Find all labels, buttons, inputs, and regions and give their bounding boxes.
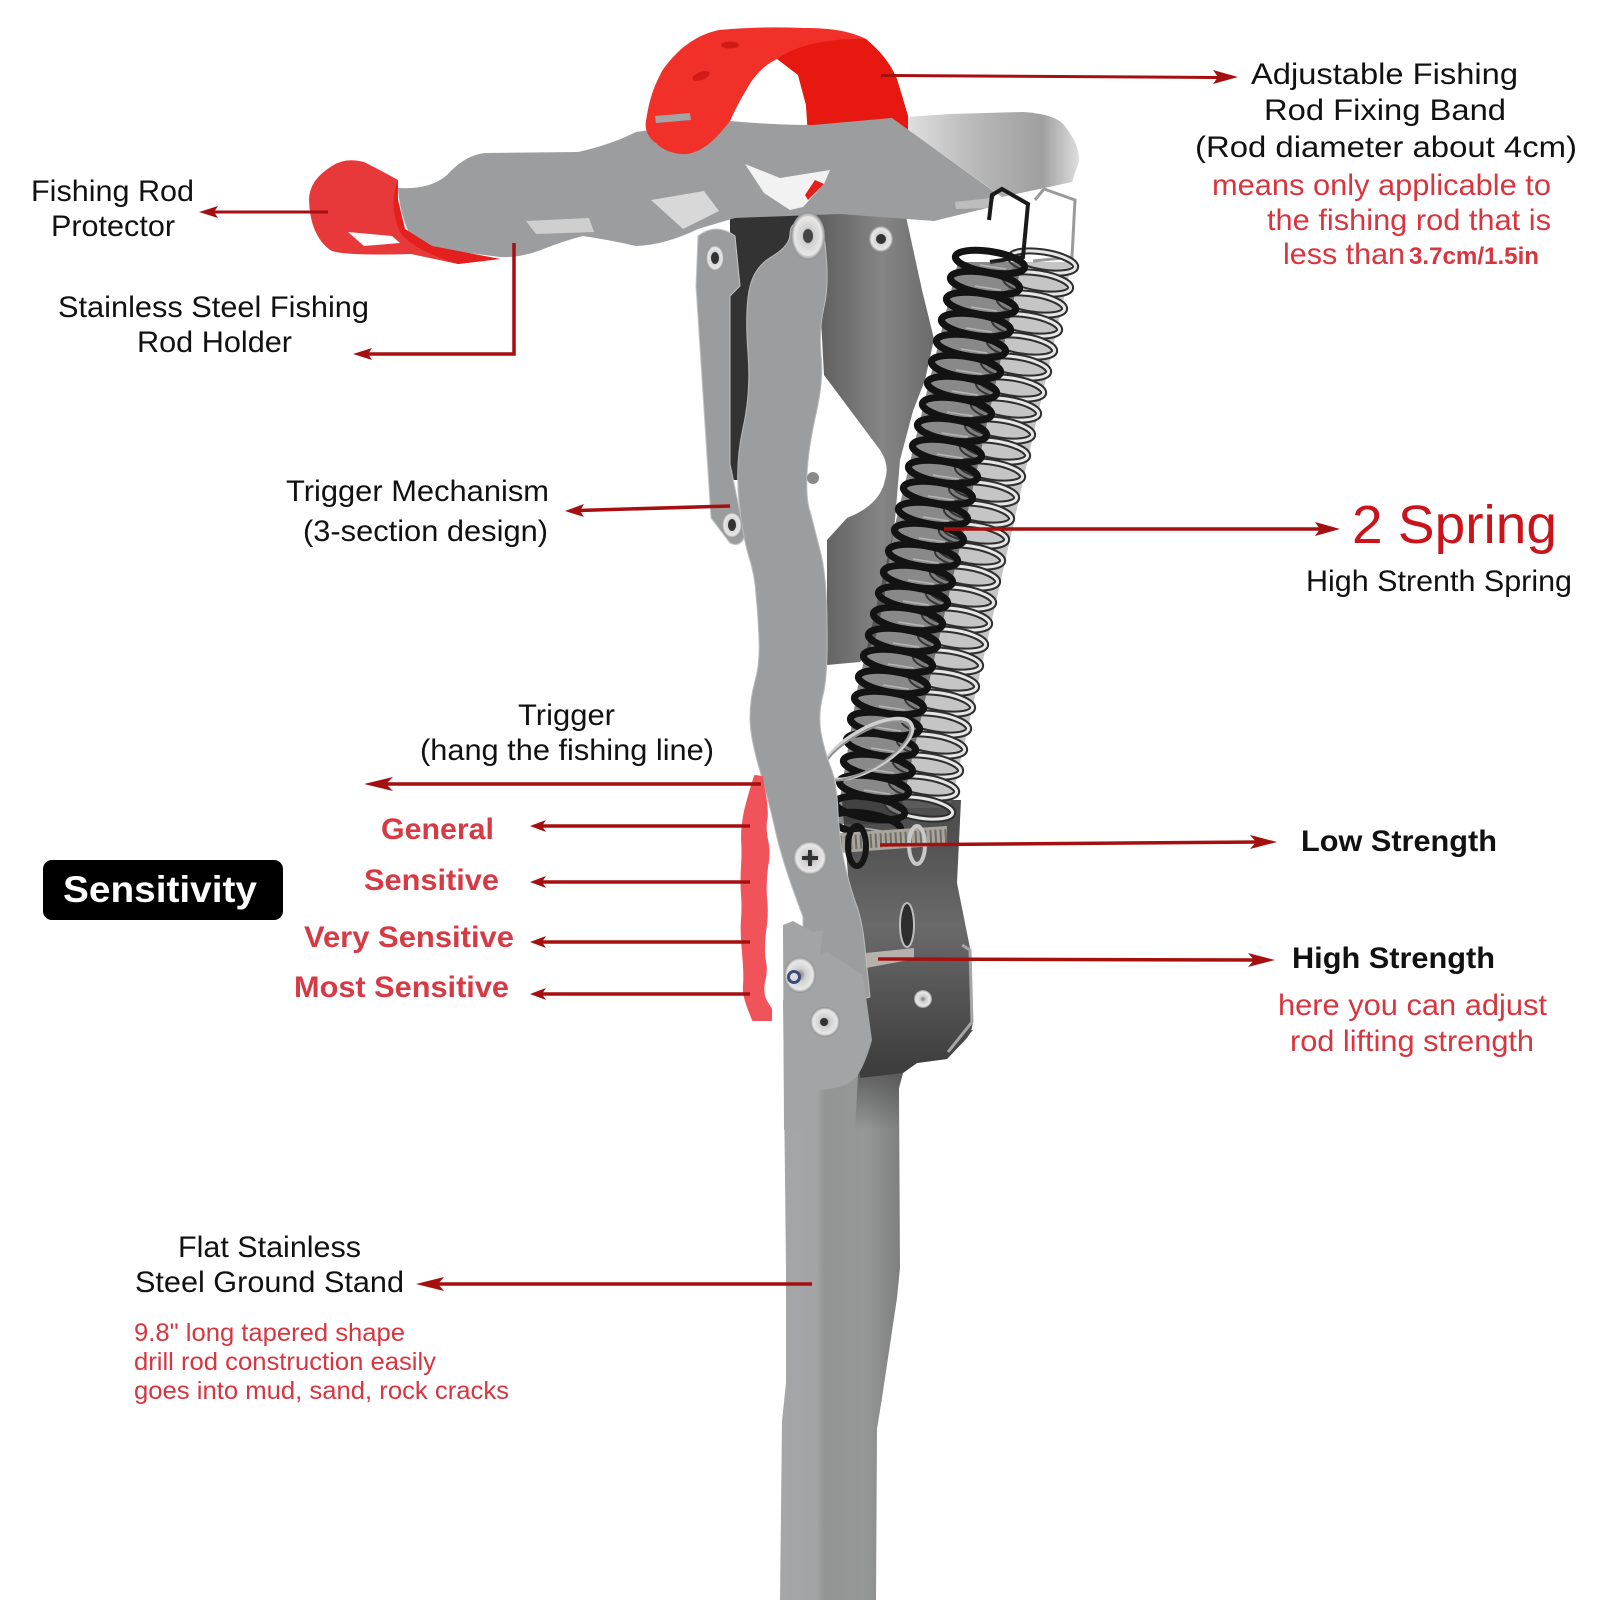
note: rod diameter limit: means only applicable to <box>1212 169 1551 202</box>
label: 2 spring: 2 Spring <box>1352 495 1557 555</box>
label: adjustable fishing rod fixing band: Adjustable Fishing <box>1251 58 1518 91</box>
rod holder <box>398 118 996 257</box>
label: flat stainless steel ground stand: Flat Stainless <box>178 1231 361 1264</box>
label: trigger: Trigger <box>518 699 615 732</box>
holder slots <box>526 164 992 234</box>
label: trigger: (hang the fishing line) <box>420 734 714 767</box>
label: trigger mechanism <box>286 475 549 548</box>
note: rod diameter limit <box>1212 169 1551 271</box>
upper back plate <box>800 212 934 665</box>
black spring <box>830 189 1028 840</box>
badge: sensitivity <box>43 860 283 920</box>
screws and rivets <box>706 212 932 1037</box>
label: fishing rod protector: Protector <box>51 210 175 243</box>
note: tapered shape: goes into mud, sand, rock cracks <box>134 1377 509 1405</box>
label: trigger mechanism: (3-section design) <box>303 515 548 548</box>
sensitivity levels: Sensitive <box>364 864 499 897</box>
label: low strength: Low Strength <box>1301 825 1497 858</box>
label: fishing rod protector: Fishing Rod <box>31 175 194 208</box>
low strength bolt <box>840 826 947 866</box>
label: trigger mechanism: Trigger Mechanism <box>286 475 549 508</box>
label: adjustable fishing rod fixing band: Rod Fixing Band <box>1264 94 1506 127</box>
high strength rod and slot <box>866 903 914 968</box>
label: stainless steel fishing rod holder: Rod Holder <box>137 326 292 359</box>
sensitivity levels: General <box>381 813 494 846</box>
arrow: trigger <box>364 777 761 791</box>
arrow: spring <box>944 522 1340 536</box>
arrow: sensitive <box>530 876 750 888</box>
left link plate <box>696 229 745 544</box>
band front overlap <box>646 110 735 154</box>
red sensitivity trigger <box>742 776 771 1020</box>
note: rod diameter limit: less than <box>1283 238 1405 271</box>
product: fishing rod holder illustration <box>309 27 1079 1600</box>
label: high strength: High Strength <box>1292 942 1495 975</box>
note: adjust lifting strength: rod lifting strength <box>1290 1025 1534 1058</box>
note: tapered shape: drill rod construction easily <box>134 1348 437 1376</box>
label: stainless steel fishing rod holder: Stainless Steel Fishing <box>58 291 369 324</box>
label: stainless steel fishing rod holder <box>58 291 369 359</box>
ground stand <box>780 1000 903 1600</box>
note: rod diameter limit: the fishing rod that is <box>1267 204 1551 237</box>
label: flat stainless steel ground stand: Steel Ground Stand <box>135 1266 404 1299</box>
note: tapered shape <box>134 1319 509 1405</box>
arrow: rod protector <box>199 206 328 218</box>
sensitivity levels: Very Sensitive <box>304 921 514 954</box>
dark joint behind the lever <box>730 210 815 480</box>
sensitivity levels: Most Sensitive <box>294 971 509 1004</box>
sensitivity levels <box>294 813 514 1004</box>
silver spring <box>886 189 1077 823</box>
arrow: fixing band <box>881 70 1238 84</box>
arrow: ground stand <box>416 1277 812 1291</box>
arrow: low strength <box>880 835 1277 849</box>
adjustable red band <box>646 27 908 135</box>
arrow: rod holder <box>353 243 514 360</box>
note: adjust lifting strength: here you can adjust <box>1278 989 1548 1022</box>
label: 2 spring: High Strenth Spring <box>1306 565 1572 598</box>
label: flat stainless steel ground stand <box>135 1231 404 1299</box>
trigger lever plate <box>738 218 870 1000</box>
silver inner of holder <box>892 112 1079 197</box>
lower bracket plate <box>783 921 872 1130</box>
note: rod diameter limit: 3.7cm/1.5in <box>1409 243 1539 270</box>
badge: sensitivity: Sensitivity <box>63 869 257 910</box>
rod protector <box>309 160 500 264</box>
note: tapered shape: 9.8" long tapered shape <box>134 1319 405 1347</box>
key ring <box>814 707 921 792</box>
label: adjustable fishing rod fixing band: (Rod diameter about 4cm) <box>1195 131 1577 164</box>
note: adjust lifting strength <box>1278 989 1548 1058</box>
label: adjustable fishing rod fixing band <box>1195 58 1577 164</box>
label: 2 spring <box>1306 495 1572 598</box>
arrow: high strength <box>878 953 1275 967</box>
label: trigger <box>420 699 714 767</box>
arrow: most sensitive <box>530 988 750 1000</box>
arrow: very sensitive <box>530 936 750 948</box>
stand upper shadow <box>855 1030 973 1130</box>
arrow: trigger mechanism <box>565 504 730 517</box>
label: fishing rod protector <box>31 175 194 243</box>
arrow: general <box>530 820 750 832</box>
lower back plate <box>842 800 973 1078</box>
